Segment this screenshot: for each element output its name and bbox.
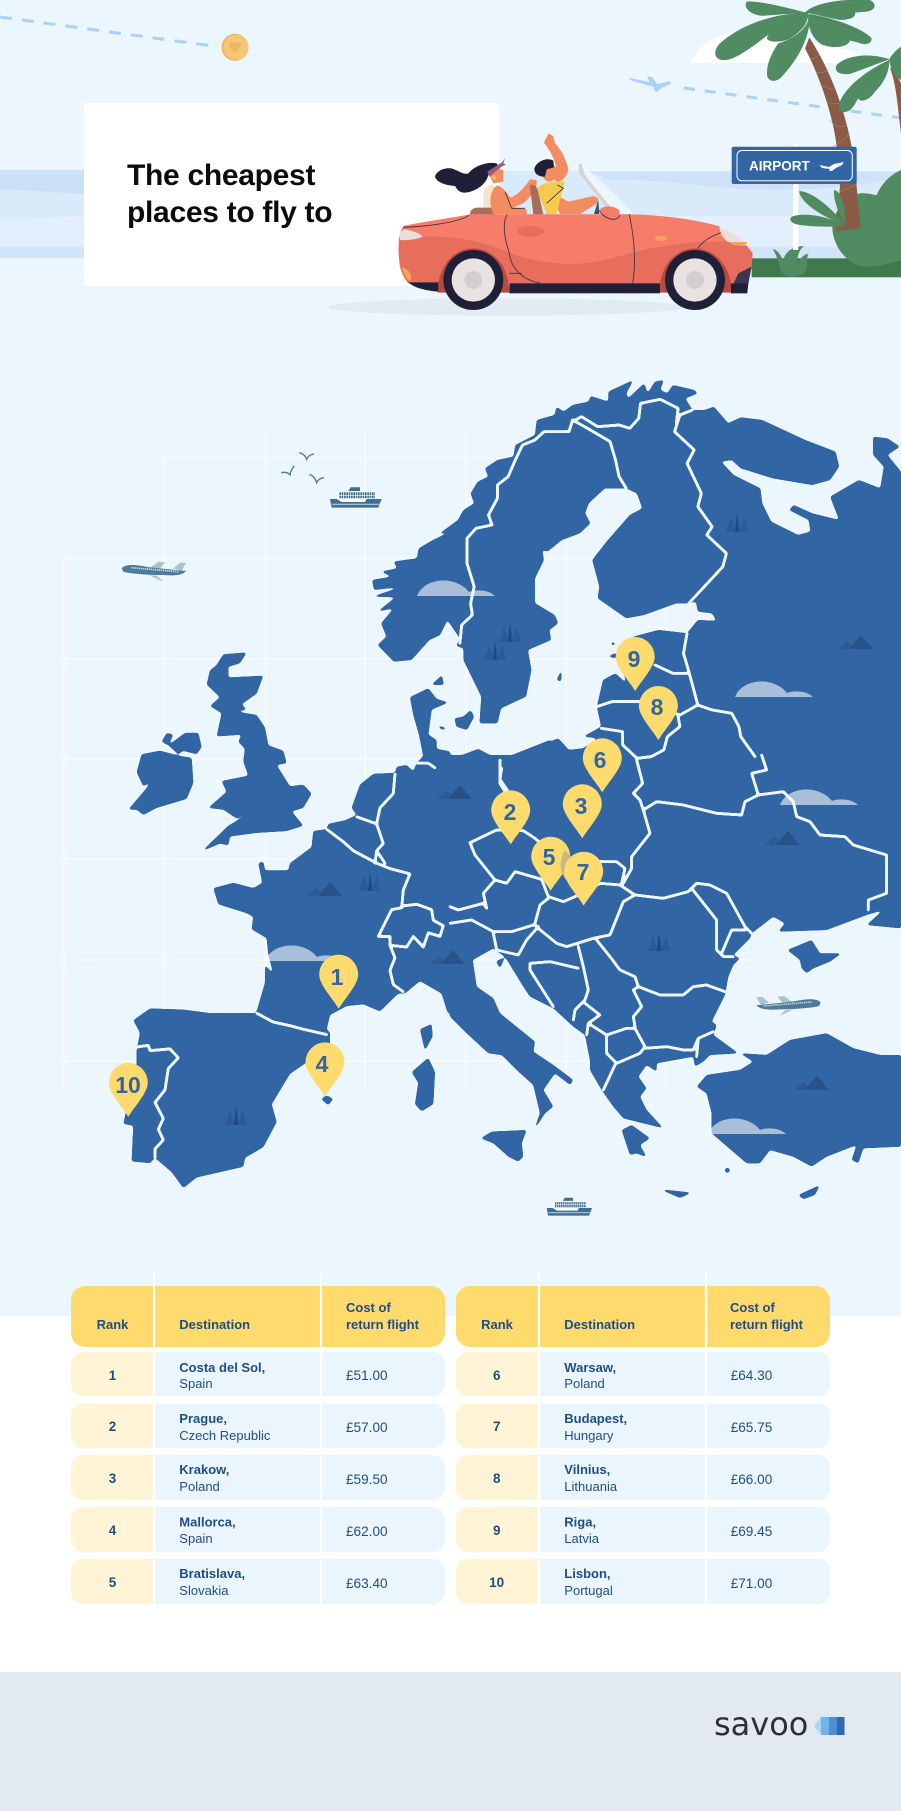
row 8	[456, 1455, 830, 1500]
car with two passengers	[398, 133, 753, 310]
row 1	[71, 1352, 445, 1396]
row 2: Prague,	[179, 1411, 227, 1426]
header row: return flight	[730, 1317, 804, 1332]
pin 1: 1	[331, 964, 344, 990]
pin 2	[491, 790, 530, 844]
map grid lines	[64, 430, 760, 1090]
dashed flight path left	[0, 17, 213, 46]
header row: Cost of	[346, 1300, 391, 1315]
pin 3: 3	[575, 793, 587, 819]
header row: Destination	[564, 1317, 635, 1332]
car body	[398, 206, 753, 293]
icon: plane west	[122, 562, 186, 582]
icon: small plane	[629, 76, 671, 92]
row 5: 5	[109, 1575, 117, 1590]
pin 8: 8	[651, 694, 664, 720]
car shadow	[328, 298, 684, 316]
row 7: Budapest,	[564, 1411, 627, 1426]
sea bands	[0, 170, 901, 258]
cloud icons	[265, 580, 858, 1134]
header row: Rank	[97, 1317, 129, 1332]
row 4: 4	[109, 1523, 117, 1538]
row 5	[71, 1559, 445, 1604]
row 2: Czech Republic	[179, 1428, 271, 1443]
white cloud behind palm	[690, 30, 870, 63]
passengers	[435, 133, 633, 214]
table: ranks 6 to 10	[456, 1286, 830, 1604]
row 3: Poland	[179, 1479, 220, 1494]
tree icons	[225, 513, 748, 1125]
pin 9: 9	[628, 646, 640, 672]
row 3	[71, 1455, 445, 1500]
icon: coin	[222, 34, 248, 61]
row 1: £51.00	[346, 1368, 388, 1383]
row 6: Warsaw,	[564, 1360, 616, 1375]
icon: birds	[281, 453, 324, 483]
row 5: Bratislava,	[179, 1566, 245, 1581]
row 10: Lisbon,	[564, 1566, 611, 1581]
header illustration	[0, 0, 901, 316]
table: ranks 1 to 5	[71, 1286, 445, 1604]
Europe landmass	[123, 380, 901, 1199]
pin 5: 5	[543, 844, 556, 870]
row 5: Slovakia	[179, 1583, 229, 1598]
airport sign	[732, 147, 857, 184]
pin 2: 2	[504, 799, 516, 825]
row 9: 9	[493, 1523, 500, 1538]
header illustration: places to fly to	[127, 196, 332, 229]
pin 7: 7	[577, 859, 589, 885]
row 4: Mallorca,	[179, 1515, 236, 1530]
row 7: £65.75	[731, 1420, 772, 1435]
row 9: Riga,	[564, 1515, 596, 1530]
western Europe	[123, 652, 550, 1188]
row 8: Lithuania	[564, 1479, 618, 1494]
row 6	[456, 1352, 830, 1396]
icon: ship south	[547, 1198, 592, 1216]
pin 8	[639, 686, 678, 740]
header row: return flight	[346, 1317, 420, 1332]
page background: white table band	[0, 1316, 901, 1672]
central and eastern Europe	[450, 755, 901, 1199]
palms, bush and ground	[715, 0, 901, 277]
row 1: Spain	[179, 1376, 213, 1391]
country borders	[137, 399, 887, 1158]
row 3: 3	[109, 1471, 117, 1486]
row 6: Poland	[564, 1376, 605, 1391]
row 4	[71, 1507, 445, 1552]
row 10: Portugal	[564, 1583, 613, 1598]
header row: Rank	[481, 1317, 514, 1332]
row 10	[456, 1559, 830, 1604]
row 10: 10	[489, 1575, 504, 1590]
destination pins	[109, 637, 678, 1117]
dashed flight path right	[684, 88, 901, 118]
row 9	[456, 1507, 830, 1552]
row 5: £63.40	[346, 1576, 388, 1591]
pin 5	[531, 837, 570, 891]
header row: Cost of	[730, 1300, 775, 1315]
savoo logo: savoo	[714, 1705, 808, 1743]
row 6: £64.30	[731, 1368, 773, 1383]
row 7	[456, 1404, 830, 1448]
pin 10	[109, 1063, 148, 1117]
pin 10: 10	[115, 1072, 141, 1098]
row 4: £62.00	[346, 1524, 388, 1539]
pin 1	[319, 955, 358, 1009]
page background: sky	[0, 0, 901, 1316]
row 6: 6	[493, 1368, 501, 1383]
row 2: 2	[109, 1419, 116, 1434]
header row	[456, 1286, 830, 1347]
row 8: 8	[493, 1471, 501, 1486]
row 8: £66.00	[731, 1472, 773, 1487]
pin 4	[306, 1042, 344, 1096]
pin 6	[583, 738, 622, 792]
row 7: Hungary	[564, 1428, 614, 1443]
header row	[71, 1286, 445, 1347]
row 3: Krakow,	[179, 1462, 229, 1477]
row 10: £71.00	[731, 1576, 773, 1591]
Scandinavia, Finland, north Russia	[372, 380, 901, 765]
airport sign: AIRPORT	[749, 159, 811, 174]
row 9: Latvia	[564, 1531, 600, 1546]
footer band	[0, 1672, 901, 1811]
pin 9	[616, 637, 655, 691]
row 3: £59.50	[346, 1472, 388, 1487]
icon: plane east	[756, 996, 821, 1016]
title card	[84, 103, 499, 286]
map section	[64, 380, 901, 1216]
pin 3	[563, 784, 602, 838]
row 1: Costa del Sol,	[179, 1360, 265, 1375]
pin 6: 6	[594, 747, 606, 773]
row 9: £69.45	[731, 1524, 772, 1539]
title: The cheapest	[127, 159, 315, 192]
front and rear wheels	[443, 250, 725, 310]
row 4: Spain	[179, 1531, 213, 1546]
row 2: £57.00	[346, 1420, 388, 1435]
row 7: 7	[493, 1419, 500, 1434]
mountain icons	[307, 635, 873, 1090]
row 8: Vilnius,	[564, 1462, 610, 1477]
header row: Destination	[179, 1317, 250, 1332]
row 1: 1	[109, 1368, 117, 1383]
icon: ship north	[330, 487, 382, 508]
pin 7	[561, 850, 603, 906]
row 2	[71, 1404, 445, 1448]
pin 4: 4	[316, 1051, 329, 1077]
